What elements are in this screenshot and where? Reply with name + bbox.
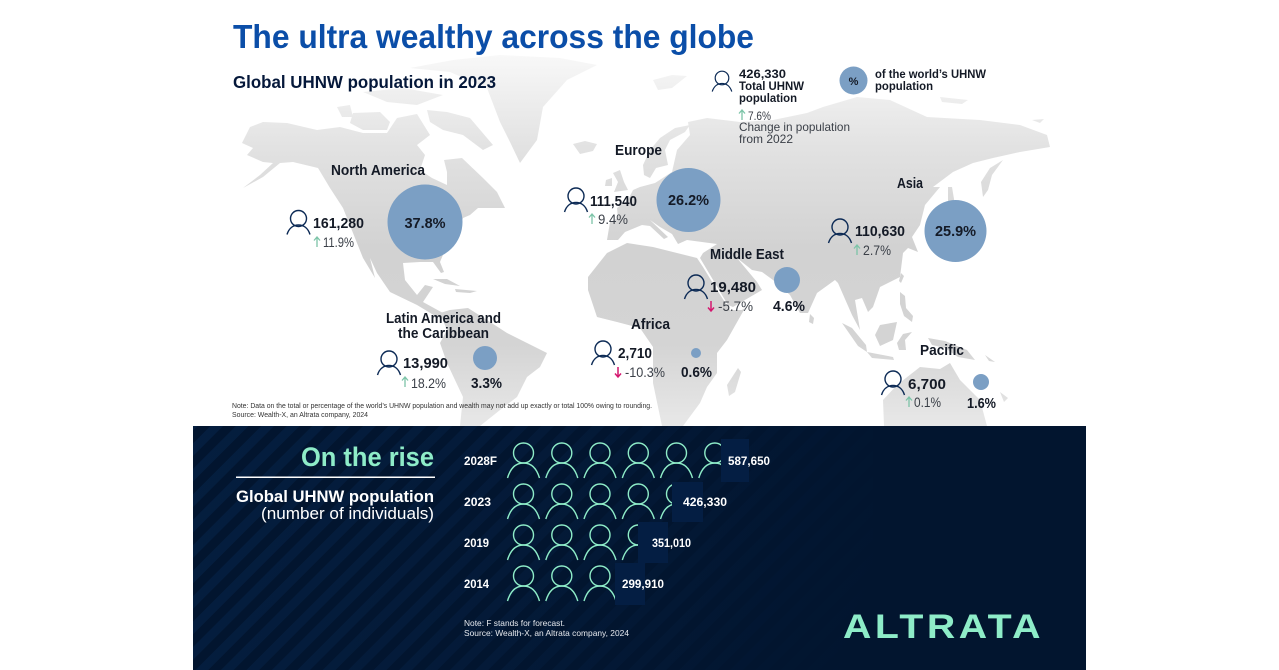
icons bbox=[508, 443, 731, 478]
share bubble bbox=[774, 267, 800, 293]
population: 19,480 bbox=[710, 279, 756, 296]
region: Africa bbox=[592, 317, 712, 381]
region name: Pacific bbox=[920, 343, 964, 359]
region name: North America bbox=[331, 163, 426, 179]
landmass: Scandinavia bbox=[643, 125, 690, 178]
mask bbox=[721, 439, 749, 482]
circle key bbox=[840, 66, 868, 94]
year: 2023 bbox=[464, 495, 491, 509]
change: -5.7% bbox=[718, 298, 753, 314]
heading: On the rise bbox=[301, 442, 434, 472]
icon: person bbox=[882, 371, 904, 395]
landmass: Kamchatka and Japan bbox=[948, 160, 1003, 205]
landmass: Taiwan and Philippines bbox=[899, 273, 913, 322]
change: 11.9% bbox=[323, 234, 354, 250]
landmass: South America bbox=[440, 308, 547, 426]
value: 351,010 bbox=[652, 536, 691, 550]
change: -10.3% bbox=[625, 364, 665, 380]
change arrow bbox=[314, 237, 320, 247]
row: 2028F bbox=[464, 439, 770, 482]
share value: 3.3% bbox=[471, 376, 502, 392]
change arrow bbox=[402, 377, 408, 387]
change: 2.7% bbox=[863, 242, 891, 258]
landmass: North America bbox=[242, 114, 505, 318]
map note and source bbox=[232, 403, 652, 419]
population: 6,700 bbox=[908, 376, 946, 393]
subtitle: Global UHNW population in 2023 bbox=[233, 72, 496, 92]
share bubble bbox=[691, 348, 701, 358]
panel: On the rise bbox=[193, 426, 1086, 670]
pictogram chart bbox=[464, 439, 770, 605]
icons bbox=[508, 484, 692, 519]
legend: total population bbox=[712, 69, 850, 146]
population: 2,710 bbox=[618, 345, 652, 362]
share value: 37.8% bbox=[404, 216, 446, 232]
population: 110,630 bbox=[855, 223, 905, 240]
year: 2014 bbox=[464, 577, 489, 591]
mask bbox=[615, 563, 645, 605]
note: Note: Data on the total or percentage of the world’s UHNW population and wealth may not add up exactly or total 100% owing to rounding. bbox=[232, 403, 652, 410]
landmass: Borneo, Sulawesi bbox=[875, 322, 912, 350]
icon: person bbox=[828, 219, 852, 243]
landmass: Canadian Arctic islands bbox=[337, 88, 493, 150]
value: 426,330 bbox=[683, 495, 727, 509]
panel background bbox=[193, 426, 1086, 670]
share value: 1.6% bbox=[967, 396, 996, 412]
percent sign: % bbox=[849, 76, 859, 88]
year: 2028F bbox=[464, 454, 497, 468]
share bubble bbox=[656, 168, 720, 232]
landmass: Australia bbox=[883, 363, 987, 426]
legend: share circle bbox=[840, 66, 986, 94]
landmass: Sri Lanka bbox=[809, 314, 814, 324]
region name, line 2: the Caribbean bbox=[398, 326, 489, 342]
change label: Change in population bbox=[739, 120, 850, 134]
row: 2023 bbox=[464, 482, 727, 522]
title: The ultra wealthy across the globe bbox=[233, 18, 754, 55]
value: 587,650 bbox=[728, 454, 770, 468]
landmass: Madagascar bbox=[727, 368, 741, 396]
region name: Asia bbox=[897, 176, 924, 192]
landmass: Iceland bbox=[573, 141, 597, 154]
region: Middle East bbox=[684, 247, 805, 315]
source: Source: Wealth-X, an Altrata company, 2024 bbox=[232, 412, 368, 419]
icons bbox=[508, 525, 654, 560]
icon: person bbox=[564, 188, 588, 212]
landmass: Greenland bbox=[410, 55, 597, 163]
landmass: Arctic islands bbox=[653, 75, 1044, 123]
chart source: Source: Wealth-X, an Altrata company, 2024 bbox=[464, 628, 629, 638]
total value: 426,330 bbox=[739, 69, 786, 81]
icon: up arrow bbox=[739, 110, 745, 120]
landmass: Eurasia bbox=[607, 97, 1050, 330]
region: Pacific bbox=[882, 343, 996, 412]
change: 9.4% bbox=[598, 211, 628, 227]
change arrow bbox=[854, 245, 860, 255]
diagonal stripe texture bbox=[193, 426, 873, 670]
share bubble bbox=[388, 184, 462, 260]
change: 18.2% bbox=[411, 375, 446, 391]
share value: 25.9% bbox=[935, 224, 976, 240]
region name: Middle East bbox=[710, 247, 784, 263]
share bubble bbox=[473, 346, 497, 370]
region name: Africa bbox=[631, 317, 671, 333]
change label: from 2022 bbox=[739, 132, 793, 146]
landmass: Sumatra and Java bbox=[842, 323, 894, 360]
icon: person bbox=[287, 210, 310, 234]
icon: person bbox=[378, 351, 400, 375]
change arrow bbox=[906, 397, 912, 407]
share value: 4.6% bbox=[773, 299, 805, 315]
population: 13,990 bbox=[403, 355, 448, 372]
share value: 0.6% bbox=[681, 365, 712, 381]
region: Europe bbox=[564, 143, 720, 232]
population: 111,540 bbox=[590, 193, 637, 210]
population: 161,280 bbox=[313, 215, 364, 232]
stripe fade bbox=[193, 426, 874, 670]
icon: person bbox=[592, 341, 614, 365]
landmass: New Zealand bbox=[985, 355, 1008, 402]
world map bbox=[242, 55, 1050, 426]
mask bbox=[638, 522, 668, 563]
logo: Altrata: ALTRATA bbox=[843, 608, 1044, 646]
share label: population bbox=[875, 81, 933, 93]
row: 2019 bbox=[464, 522, 691, 563]
icons bbox=[508, 566, 616, 601]
region name: Europe bbox=[615, 143, 662, 159]
change arrow bbox=[708, 301, 714, 311]
landmass: British Isles bbox=[605, 170, 628, 192]
landmass: Africa bbox=[588, 243, 745, 426]
region: Asia bbox=[828, 176, 986, 262]
change arrow bbox=[615, 367, 621, 377]
total label: population bbox=[739, 93, 797, 105]
total change: 7.6% bbox=[748, 109, 771, 123]
share label: of the world’s UHNW bbox=[875, 69, 986, 81]
change arrow bbox=[589, 214, 595, 224]
share bubble bbox=[924, 200, 986, 262]
subheading: Global UHNW population bbox=[236, 487, 434, 506]
chart note: Note: F stands for forecast. bbox=[464, 618, 565, 628]
unit label: (number of individuals) bbox=[261, 504, 434, 523]
value: 299,910 bbox=[622, 577, 664, 591]
region: North America bbox=[287, 163, 462, 260]
region: Latin America and the Caribbean bbox=[378, 311, 502, 392]
region name, line 1: Latin America and bbox=[386, 311, 501, 327]
landmass: Caribbean bbox=[433, 279, 477, 293]
change: 0.1% bbox=[914, 394, 941, 410]
mask bbox=[672, 482, 703, 522]
total label: Total UHNW bbox=[739, 81, 804, 93]
icon: person bbox=[712, 71, 732, 92]
icon: person bbox=[684, 275, 708, 299]
row: 2014 bbox=[464, 563, 664, 605]
landmass: New Guinea bbox=[928, 338, 975, 360]
heading rule bbox=[236, 476, 435, 478]
share bubble bbox=[973, 374, 989, 390]
year: 2019 bbox=[464, 536, 489, 550]
share value: 26.2% bbox=[668, 193, 709, 209]
